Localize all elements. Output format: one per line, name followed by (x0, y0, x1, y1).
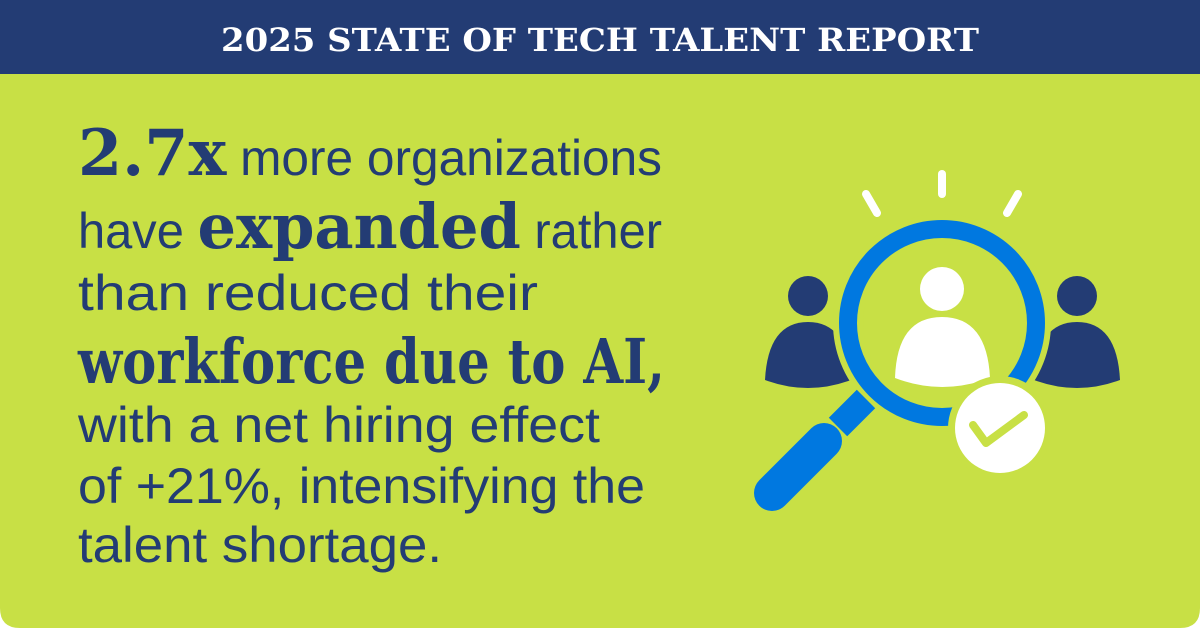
side people (765, 276, 1120, 388)
main statement text: 2.7x more organizations (78, 116, 662, 191)
header bar (0, 0, 1200, 74)
main statement text: workforce due to AI, (77, 325, 665, 398)
main statement text: have expanded rather (78, 190, 662, 263)
main statement text: of +21%, intensifying the (78, 458, 645, 514)
center person (895, 267, 990, 387)
main statement text: talent shortage. (78, 517, 442, 573)
main statement text (77, 116, 665, 573)
handle (772, 399, 866, 493)
ring gap (848, 229, 1036, 417)
header bar: 2025 STATE OF TECH TALENT REPORT (221, 21, 979, 59)
ring (848, 229, 1036, 417)
icon: magnifier with people (765, 174, 1120, 493)
check badge (948, 376, 1052, 480)
main statement text: than reduced their (78, 265, 538, 321)
main statement text: with a net hiring effect (77, 397, 600, 453)
rays (866, 174, 1018, 213)
